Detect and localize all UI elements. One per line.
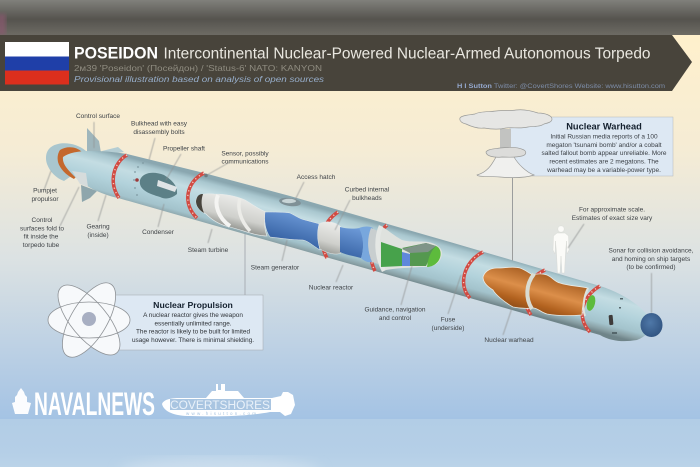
part labels: Fuse [441, 316, 456, 324]
bolts [133, 162, 144, 196]
part labels: (to be confirmed) [626, 264, 676, 271]
part labels: Steam generator [251, 264, 300, 272]
folded fin [72, 171, 88, 187]
body text: The reactor is likely to be built for limited [136, 328, 250, 336]
pumpjet shroud [46, 143, 86, 181]
icon: ship [12, 388, 31, 414]
body text: Initial Russian media reports of a 100 [550, 134, 658, 140]
part labels: surfaces fold to [20, 226, 64, 232]
designation line: 2м39 'Poseidon' (Посейдон) / 'Status-6' NATO: KANYON [74, 63, 322, 73]
part labels: Access hatch [297, 174, 336, 181]
body text [541, 134, 667, 174]
part labels: Gearing [86, 224, 110, 230]
leader lines [44, 122, 652, 335]
part labels: and homing on ship targets [612, 256, 691, 263]
torpedo [46, 128, 663, 341]
reactor bulkhead [318, 222, 341, 254]
body text: salted fallout bomb appear unreliable. More [541, 150, 667, 157]
ring stripes [113, 155, 600, 332]
sonar dome [640, 313, 662, 337]
lower band [0, 419, 700, 467]
header banner [0, 35, 692, 91]
blurred top band [0, 0, 700, 35]
panel: nuclear propulsion [48, 275, 263, 365]
part labels: For approximate scale. [579, 206, 645, 214]
logo: Covert Shores [162, 384, 295, 416]
part labels: (underside) [432, 325, 464, 332]
flag: Russia [5, 42, 69, 84]
part labels: Steam turbine [188, 247, 229, 254]
part labels: Sensor, possibly [221, 150, 269, 158]
steam generator [265, 212, 320, 250]
heading: Nuclear Propulsion [153, 300, 233, 310]
part labels: Control [32, 217, 53, 224]
part labels: Estimates of exact size vary [572, 215, 653, 222]
part labels: (inside) [87, 232, 109, 239]
nuclear warhead [483, 267, 597, 316]
subtitle: Intercontinental Nuclear-Powered Nuclear-Armed Autonomous Torpedo [164, 46, 650, 62]
body text: A nuclear reactor gives the weapon [143, 312, 243, 319]
human figure for scale [553, 226, 569, 273]
author credit: H I Sutton Twitter: @CovertShores Website: www.hisutton.com [457, 83, 665, 90]
part labels: Propeller shaft [163, 146, 205, 152]
part labels: torpedo tube [23, 242, 60, 249]
body text: essentially unlimited range. [154, 320, 232, 328]
logo: Covert Shores: www.hisutton.com [186, 411, 256, 416]
part labels: Sonar for collision avoidance, [609, 248, 694, 254]
part labels: Pumpjet [33, 188, 57, 194]
propeller shaft cutaway [140, 173, 177, 198]
body text [132, 312, 254, 344]
body text: recent estimates are 2 megatons. The [549, 158, 659, 166]
body text: usage however. There is minimal shielding. [132, 337, 254, 344]
hull [63, 151, 651, 341]
part labels: disassembly bolts [133, 129, 185, 136]
icon: mushroom cloud [460, 110, 552, 178]
title: POSEIDON [74, 44, 158, 62]
body text: megaton 'tsunami bomb' and/or a cobalt [546, 142, 662, 149]
steam turbine cutaway [196, 194, 267, 236]
sensor [204, 174, 208, 177]
guidance bay [378, 226, 442, 271]
part labels: Nuclear reactor [309, 284, 354, 292]
fins [81, 128, 124, 202]
logo: Naval News [12, 386, 155, 422]
nose details [609, 298, 623, 334]
access hatch [279, 197, 301, 207]
nuclear reactor [340, 226, 378, 264]
part labels: propulsor [31, 196, 59, 203]
part labels: communications [222, 158, 269, 166]
part labels: Bulkhead with easy [131, 120, 188, 128]
logo: Naval News: NAVALNEWS [34, 386, 155, 422]
provisional note: Provisional illustration based on analysis of open sources [74, 74, 325, 84]
part labels: Curbed internal [345, 186, 390, 194]
part labels: Guidance, navigation [364, 306, 426, 314]
part labels: and control [379, 315, 412, 322]
body text: warhead may be a variable-power type. [546, 167, 661, 174]
icon: atom [48, 275, 130, 365]
ring rivets [113, 155, 600, 332]
logo: Covert Shores: COVERTSHORES [170, 400, 270, 412]
callout leader lines [245, 176, 512, 295]
part labels: Condenser [142, 229, 175, 236]
panel: nuclear warhead [460, 110, 673, 178]
part labels: fit inside the [24, 234, 59, 240]
part labels: Control surface [76, 113, 120, 120]
part labels: bulkheads [352, 195, 383, 202]
heading: Nuclear Warhead [566, 122, 642, 132]
part labels [20, 113, 694, 344]
part labels: Nuclear warhead [484, 337, 534, 344]
